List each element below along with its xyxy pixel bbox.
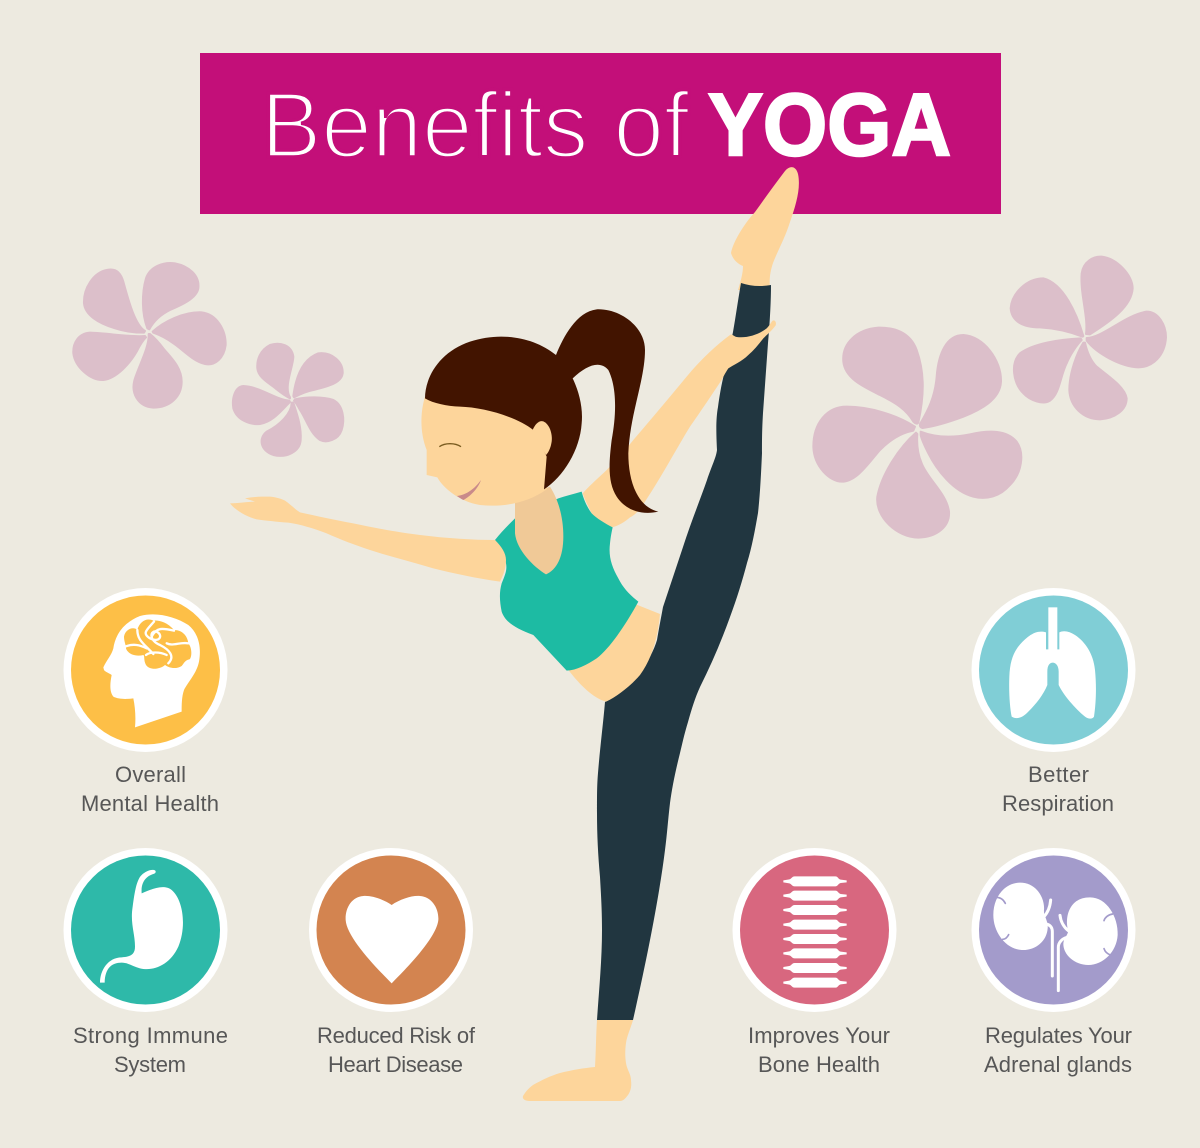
label: Reduced Risk of Heart Disease — [317, 1023, 476, 1077]
label: Better Respiration: Better — [1028, 762, 1089, 787]
label: Overall Mental Health — [81, 762, 219, 816]
label: Regulates Your Adrenal glands — [984, 1023, 1132, 1077]
near arm — [230, 497, 506, 582]
flower: right large — [813, 328, 1021, 538]
flower: right small — [1011, 257, 1166, 419]
label: Improves Your Bone Health: Improves Your — [748, 1023, 890, 1048]
label: Regulates Your Adrenal glands: Regulates Your — [985, 1023, 1132, 1048]
icon: mental health — [64, 588, 228, 752]
neck — [515, 487, 563, 574]
label: Strong Immune System — [73, 1023, 228, 1077]
icon: heart — [309, 848, 473, 1012]
icon: respiration lungs — [972, 588, 1136, 752]
head with brain — [103, 614, 200, 727]
label: Improves Your Bone Health — [748, 1023, 890, 1077]
label: Better Respiration: Respiration — [1002, 791, 1114, 816]
upper body — [230, 309, 776, 702]
label: Better Respiration — [1002, 762, 1114, 816]
flower: upper left large — [73, 263, 226, 408]
label: Reduced Risk of Heart Disease: Reduced Risk of — [317, 1023, 476, 1048]
ear — [533, 421, 552, 455]
title: Benefits of: Benefits of — [261, 73, 689, 177]
flower: upper left small — [233, 344, 343, 456]
label: Overall Mental Health: Overall — [115, 762, 186, 787]
leggings — [597, 283, 771, 1020]
label: Improves Your Bone Health: Bone Health — [758, 1052, 880, 1077]
hair and ponytail — [425, 309, 658, 513]
label: Regulates Your Adrenal glands: Adrenal glands — [984, 1052, 1132, 1077]
label: Strong Immune System: System — [114, 1052, 186, 1077]
face — [421, 397, 553, 506]
waist — [568, 603, 660, 702]
eye — [439, 444, 461, 447]
icon: kidneys — [972, 848, 1136, 1012]
crop top — [495, 492, 638, 671]
label: Overall Mental Health: Mental Health — [81, 791, 219, 816]
far arm and hand — [583, 320, 776, 527]
standing foot — [523, 1020, 633, 1101]
label: Reduced Risk of Heart Disease: Heart Disease — [328, 1052, 463, 1077]
raised foot — [731, 167, 799, 290]
icon: immune system stomach — [64, 848, 228, 1012]
mouth — [457, 480, 481, 500]
yoga figure — [523, 167, 799, 1101]
title banner — [200, 53, 1001, 214]
icon: spine — [732, 848, 896, 1012]
label: Strong Immune System: Strong Immune — [73, 1023, 228, 1048]
title: YOGA: YOGA — [708, 75, 951, 174]
